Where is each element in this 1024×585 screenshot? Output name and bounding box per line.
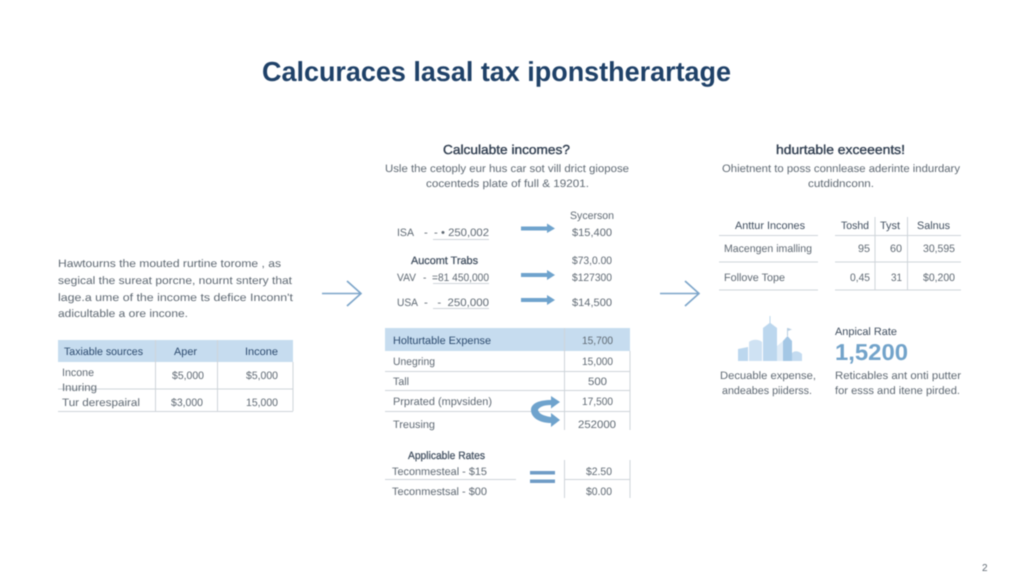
table: annual incomes: Macengen imalling — [724, 243, 812, 255]
arrow: left to middle — [322, 281, 361, 306]
heading: calculate incomes: Calculabte incomes? — [443, 142, 570, 157]
stat: applicable rate — [835, 326, 961, 397]
stat: applicable rate: for esss and itene pirded. — [835, 385, 960, 397]
table: applicable rates — [385, 460, 630, 498]
table: annual incomes: Tyst — [880, 220, 900, 232]
text block: calculate description — [385, 163, 629, 190]
calculation rows: - - 250,000 — [424, 297, 489, 309]
icon: curved double arrow — [531, 396, 560, 427]
table: annual incomes: 95 — [858, 243, 870, 255]
text block: intro paragraph: adicultable a ore incone. — [58, 308, 188, 320]
calculation rows: $73,0.00 — [572, 255, 612, 267]
calculation rows: Aucomt Trabs — [411, 255, 479, 267]
calculation rows: $14,500 — [572, 297, 612, 309]
table: applicable rates: Teconmestsal - $00 — [392, 486, 487, 498]
title: Calcuraces lasal tax iponstherartage — [262, 56, 731, 87]
icon: equals sign — [530, 471, 555, 483]
text block: deductible expense note — [720, 370, 816, 397]
table: annual incomes: 60 — [890, 243, 902, 255]
text block: calculate description: Usle the cetoply eur hus car sot vill drict giopose — [385, 163, 629, 175]
table: taxable sources: Incone — [245, 346, 278, 358]
table: annual incomes: 30,595 — [923, 243, 955, 255]
table: taxable sources: Incone — [62, 367, 94, 379]
table: applicable rates: $0.00 — [586, 486, 612, 498]
table: deductible expense: 500 — [588, 376, 607, 388]
table: annual incomes: Salnus — [917, 220, 951, 232]
stat: applicable rate: Reticables ant onti putter — [835, 370, 961, 382]
table: deductible expense: Holturtable Expense — [393, 335, 491, 347]
text block: intro paragraph — [58, 258, 293, 320]
table: taxable sources: Taxiable sources — [64, 346, 144, 358]
text block: intro paragraph: segical the sureat porcne, nournt sntery that — [58, 275, 292, 287]
text block: deductible description: Ohietnent to poss connlease aderinte indurdary — [722, 163, 961, 175]
stat: applicable rate: 1,5200 — [835, 339, 908, 365]
table: taxable sources: 15,000 — [246, 397, 278, 409]
table: taxable sources: $3,000 — [171, 397, 203, 409]
arrow: middle to right — [660, 281, 699, 306]
text block: intro paragraph: lage.a ume of the income ts defice Inconn't — [58, 292, 293, 304]
calculation rows: ISA — [397, 227, 415, 239]
table: deductible expense: 252000 — [578, 419, 616, 431]
table: deductible expense: Prprated (mpvsiden) — [393, 396, 492, 408]
table: deductible expense: 15,700 — [582, 335, 613, 347]
table: deductible expense: 17,500 — [582, 396, 613, 408]
heading: deductible exceeds: hdurtable exceeents! — [776, 142, 905, 157]
calculation rows: $15,400 — [572, 227, 612, 239]
text block: calculate description: cocenteds plate of full & 19201. — [426, 178, 589, 190]
stat: applicable rate: Anpical Rate — [835, 326, 897, 338]
calculation rows: Sycerson — [570, 210, 614, 222]
calculation rows: USA — [397, 297, 419, 309]
table: taxable sources: $5,000 — [172, 370, 204, 382]
text block: deductible expense note: andeabes piiderss. — [722, 385, 812, 397]
table: annual incomes: 0,45 — [850, 272, 870, 284]
table: deductible expense: Tall — [393, 376, 409, 388]
calculation rows: VAV — [397, 272, 417, 284]
table: deductible expense: 15,000 — [582, 356, 613, 368]
text block: deductible description: cutdidnconn. — [808, 178, 874, 190]
text block: deductible description — [722, 163, 961, 190]
table: annual incomes: Anttur Incones — [735, 220, 806, 232]
table: annual incomes: 31 — [891, 272, 902, 284]
table: annual incomes: Follove Tope — [724, 272, 785, 284]
panel: calculate incomes — [385, 142, 630, 498]
panel: left intro — [58, 258, 293, 412]
calculation rows: $127300 — [572, 272, 612, 284]
table: annual incomes: Toshd — [841, 220, 869, 232]
table: taxable sources — [58, 340, 293, 412]
table: annual incomes: $0,200 — [923, 272, 955, 284]
table: annual incomes — [719, 217, 961, 290]
page number: 2 — [982, 563, 988, 574]
table: deductible expense: Treusing — [393, 419, 435, 431]
table: applicable rates: $2.50 — [586, 466, 612, 478]
text block: intro paragraph: Hawtourns the mouted rurtine torome , as — [58, 258, 282, 270]
calculation rows: - - • 250,002 — [424, 227, 489, 239]
panel: deductible exceeds — [719, 142, 961, 397]
icon: city skyline — [738, 316, 802, 361]
table: taxable sources: Inuring — [62, 382, 97, 394]
table: taxable sources: Aper — [174, 346, 197, 358]
table: deductible expense — [385, 328, 630, 431]
calculation rows — [397, 210, 614, 309]
heading: applicable rates: Applicable Rates — [408, 450, 486, 462]
table: deductible expense: Unegring — [393, 356, 435, 368]
table: applicable rates: Teconmesteal - $15 — [392, 466, 487, 478]
table: taxable sources: $5,000 — [246, 370, 278, 382]
table: taxable sources: Tur derespairal — [62, 397, 140, 409]
calculation rows: - =81 450,000 — [423, 272, 489, 284]
text block: deductible expense note: Decuable expense, — [720, 370, 816, 382]
icon: row arrows — [521, 224, 555, 305]
